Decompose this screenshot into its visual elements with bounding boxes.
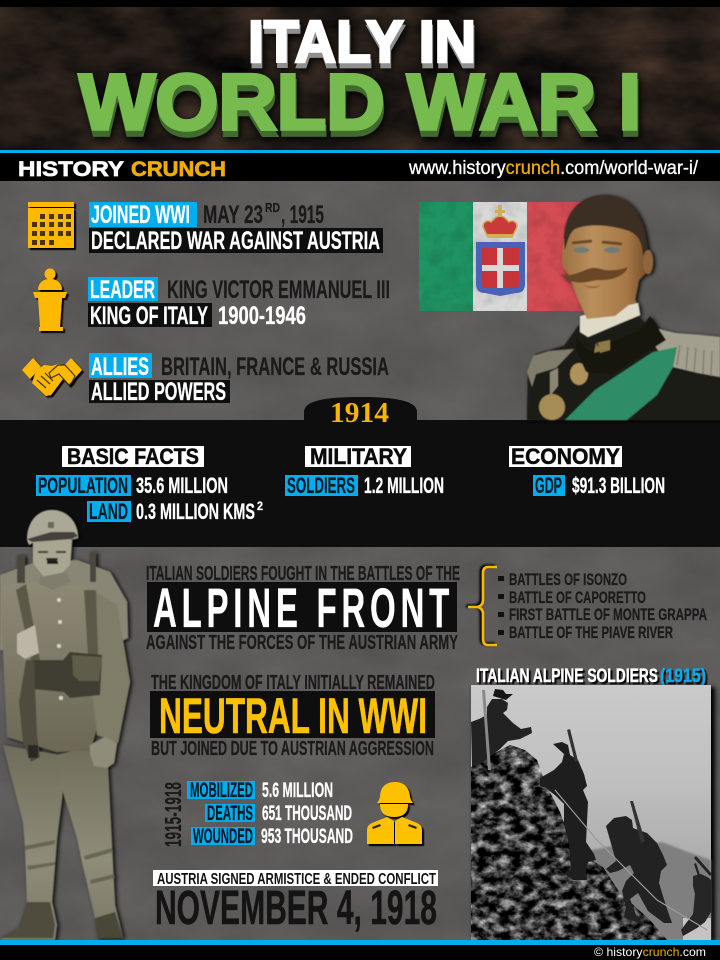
column: basic facts: BASIC FACTS [67,444,199,469]
flag crest [476,205,525,296]
text block: alpine front: ALPINE FRONT [153,576,454,639]
icon: podium leader [33,268,67,331]
text block: armistice: AUSTRIA SIGNED ARMISTICE & ENDED CONFLICT [157,871,436,888]
column: military: MILITARY [310,444,407,469]
head [561,195,653,319]
title [79,9,642,152]
column: basic facts: 35.6 MILLION [136,473,228,498]
text block: joined WWI: RD [265,200,280,215]
column: basic facts: 2 [257,499,263,513]
text block: joined WWI: JOINED WWI [91,201,190,229]
text block: neutral in WWI [150,672,435,760]
flag of the Kingdom of Italy [419,202,587,311]
house [683,918,711,940]
header banner [0,7,720,152]
rock [471,745,667,940]
neck [584,296,638,324]
rotated years label: 1915-1918 [160,782,186,847]
footer credit: © historycrunch.com [594,945,706,959]
tunic [0,582,119,752]
column: economy: GDP [535,473,562,498]
column: military [285,444,444,498]
text block: leader: 1900-1946 [218,302,306,330]
portrait of King Victor Emmanuel III [527,195,720,420]
text block: joined WWI: , 1915 [281,201,324,229]
casualty statistics: 651 THOUSAND [262,802,352,825]
year tab: 1914 [330,397,389,429]
text block: leader [88,276,390,330]
casualty statistics: 5.6 MILLION [262,779,333,802]
column: basic facts: POPULATION [38,473,128,498]
text block: armistice [153,870,438,935]
brand bar [0,153,720,181]
black collar [576,316,666,374]
rope [555,790,707,930]
website url: www.historycrunch.com/world-war-i/ [408,158,699,179]
casualty statistics: 953 THOUSAND [261,825,353,848]
column: military: SOLDIERS [287,473,355,498]
photo caption: (1915) [660,666,706,687]
blue rule [0,150,720,153]
text block: allies: ALLIED POWERS [91,378,226,406]
text block: neutral in WWI: THE KINGDOM OF ITALY INITIALLY REMAINED [151,672,435,694]
casualty statistics [187,779,353,848]
ear [643,250,653,274]
wraps shading [24,840,115,884]
buttons [57,598,63,700]
title line: Italy in: ITALY IN [249,14,477,80]
photo: Italian alpine soldiers [471,685,715,941]
hair [564,195,648,257]
right epaulette [649,327,720,377]
backpack [0,560,128,650]
sash [565,347,677,420]
brand name: CRUNCH [131,158,226,181]
soldier middle [540,729,596,880]
text block: alpine front [146,563,460,654]
footer credit [0,945,720,960]
ammo pouches [33,652,102,698]
column: economy: ECONOMY [511,444,620,469]
casualty statistics: DEATHS [207,802,253,825]
left epaulette [527,349,574,387]
text block: allies [89,353,389,406]
column: basic facts [36,444,263,524]
text block: alpine front: AGAINST THE FORCES OF THE AUSTRIAN ARMY [146,632,458,654]
right sleeve [89,592,130,743]
icon: calendar [28,202,74,248]
brand name: HISTORY [18,158,124,181]
text block: neutral in WWI: NEUTRAL IN WWI [159,688,427,744]
text block: joined WWI: MAY 23 [203,201,263,229]
soldier right [681,856,712,936]
column: military: 1.2 MILLION [364,473,444,498]
icon: soldier [367,782,422,844]
text block: neutral in WWI: BUT JOINED DUE TO AUSTRIAN AGGRESSION [151,738,434,760]
title line: Italy in: ITALY IN [248,9,476,75]
text block: armistice: NOVEMBER 4, 1918 [155,882,437,935]
casualty statistics: MOBILIZED [190,779,253,802]
column: economy: $91.3 BILLION [572,473,665,498]
text block: leader: LEADER [90,276,155,304]
rifle [19,660,40,762]
panel: 1914 facts background [0,420,720,547]
text block: allies: BRITAIN, FRANCE & RUSSIA [161,353,389,381]
bracket [466,566,497,645]
left hand [17,625,39,659]
column: basic facts: 0.3 MILLION KMS [136,499,255,524]
white collar [580,303,640,337]
photo: WWI soldier [0,510,130,940]
title line: World War I: WORLD WAR I [79,57,641,146]
moustache [561,267,628,283]
brand name [18,158,226,181]
text block: joined WWI: DECLARED WAR AGAINST AUSTRIA [91,227,380,255]
text block: leader: KING OF ITALY [90,302,208,330]
boots [0,902,55,938]
icon: handshake [22,358,82,396]
panel: 1914 facts [36,444,665,524]
text block: joined WWI [89,200,383,255]
left leg [2,745,64,940]
text block: allies: ALLIES [91,353,149,381]
casualty statistics: WOUNDED [193,825,253,848]
text block: alpine front: ITALIAN SOLDIERS FOUGHT IN THE BATTLES OF THE [146,563,460,585]
list: battles: BATTLE OF CAPORETTO [509,588,646,607]
list: battles [498,570,707,642]
head and helmet [27,510,78,590]
year tab [304,397,417,429]
column: basic facts: LAND [89,499,128,524]
blue footer rule [0,940,720,945]
list: battles: BATTLES OF ISONZO [509,570,627,589]
uniform [527,318,720,420]
right hand [90,737,117,768]
right leg [57,742,123,938]
text block: leader: KING VICTOR EMMANUEL III [167,276,390,304]
pack straps [16,584,98,664]
distant mountain [577,842,711,940]
medals [539,394,565,420]
title line: World War I: WORLD WAR I [80,63,642,152]
column: economy [509,444,665,498]
soldier top left [471,689,532,770]
photo caption: ITALIAN ALPINE SOLDIERS [476,666,658,687]
soldier climbing [606,801,672,923]
eyes [572,241,622,253]
